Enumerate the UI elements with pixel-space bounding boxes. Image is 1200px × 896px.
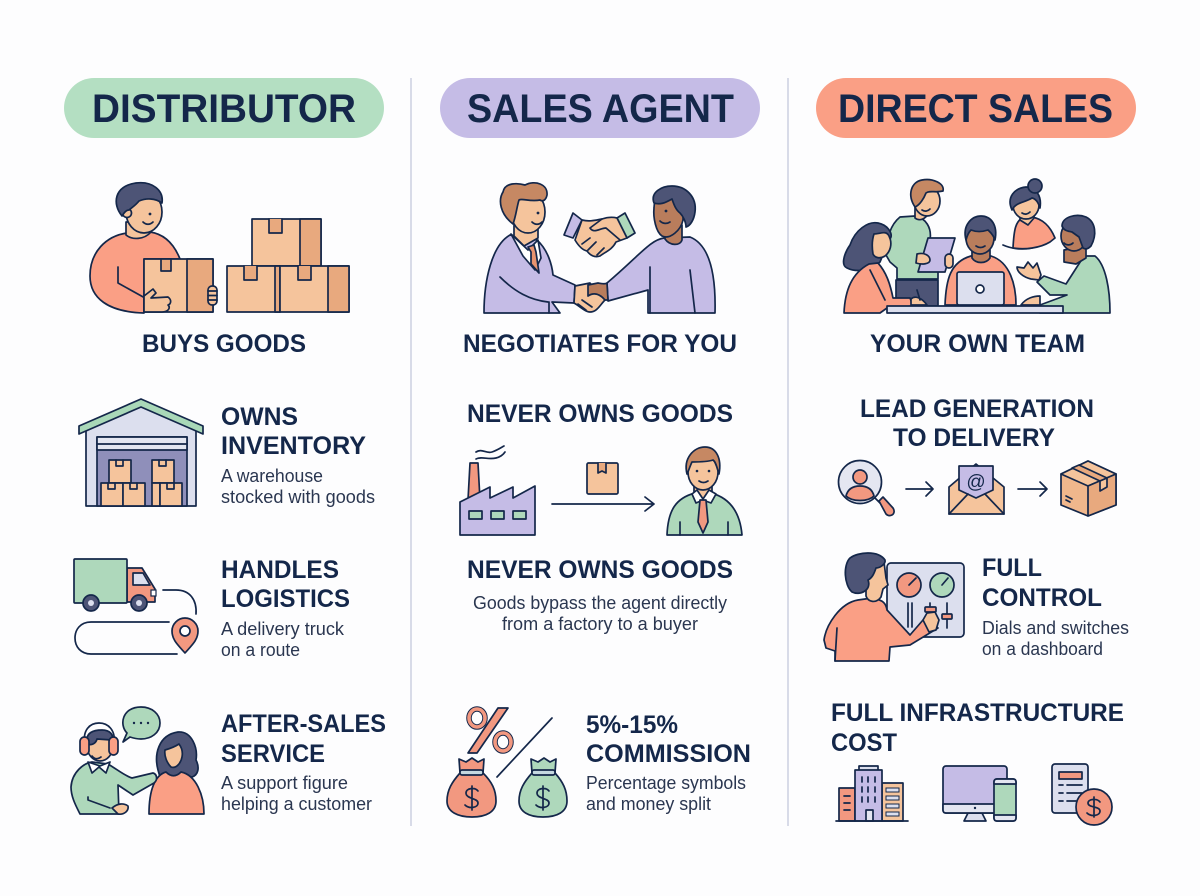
text: after-sales service: AFTER-SALES [221,710,386,738]
icon: warehouse [79,399,203,506]
icon: invoice with dollar coin [1052,764,1112,825]
heading: direct sales: DIRECT SALES [838,87,1113,131]
text: commission: 5%-15% [586,711,678,739]
text: after-sales service: helping a customer [221,794,372,814]
text: handles logistics [221,556,350,660]
text: commission: COMMISSION [586,740,751,768]
heading: lead generation to delivery [860,395,1094,452]
text: handles logistics: on a route [221,640,300,660]
text: full control: CONTROL [982,584,1102,612]
text: full control: on a dashboard [982,639,1103,659]
icon: delivery truck on a route [74,559,198,654]
label: buys goods: BUYS GOODS [142,330,306,358]
label: negotiates for you: NEGOTIATES FOR YOU [463,330,737,358]
text: owns inventory: stocked with goods [221,487,375,507]
icon: lead to delivery flow [838,460,1116,516]
heading: full infrastructure cost [831,699,1124,757]
text: commission: and money split [586,794,711,814]
text: handles logistics: HANDLES [221,556,339,584]
text: handles logistics: LOGISTICS [221,585,350,613]
heading: sales agent [440,78,760,138]
text: full control: Dials and switches [982,618,1129,638]
text: owns inventory [221,403,375,507]
heading: direct sales [816,78,1136,138]
icon: person holding box beside stacked boxes [90,183,349,313]
label: your own team: YOUR OWN TEAM [870,330,1085,358]
text: owns inventory: OWNS [221,403,298,431]
text: after-sales service [221,710,386,814]
text: after-sales service: A support figure [221,773,348,793]
icon: office buildings [836,766,908,821]
heading: lead generation to delivery: TO DELIVERY [893,424,1055,452]
text: never owns goods explanation [467,556,733,634]
heading: sales agent: SALES AGENT [467,87,734,131]
text: handles logistics: A delivery truck [221,619,345,639]
text: never owns goods explanation: from a factory to a buyer [502,614,698,634]
text: full control: FULL [982,554,1042,582]
icon: support figure helping customer [71,707,204,814]
icon: two people shaking hands [484,183,715,313]
text: commission [586,711,751,814]
icon: lead to delivery flow: @ [966,472,986,493]
text: full control [982,554,1129,659]
text: commission: Percentage symbols [586,773,746,793]
text: never owns goods explanation: NEVER OWNS GOODS [467,556,733,584]
panel: sales agent [440,78,760,817]
heading: full infrastructure cost: COST [831,729,897,757]
icon: percentage and money bags [447,708,567,817]
text: owns inventory: A warehouse [221,466,323,486]
icon: person using a dashboard [824,553,964,661]
heading: lead generation to delivery: LEAD GENERATION [860,395,1094,423]
text: after-sales service: SERVICE [221,740,325,768]
icon: computer and phone [943,766,1016,821]
icon: team around a table [844,179,1110,313]
text: owns inventory: INVENTORY [221,432,366,460]
icon: factory to buyer flow [460,446,742,535]
heading: never owns goods: NEVER OWNS GOODS [467,400,733,428]
heading: distributor [64,78,384,138]
heading: full infrastructure cost: FULL INFRASTRUCTURE [831,699,1124,727]
panel: distributor [64,78,386,814]
panel: direct sales [816,78,1136,825]
text: never owns goods explanation: Goods bypass the agent directly [473,593,727,613]
heading: distributor: DISTRIBUTOR [92,87,356,131]
